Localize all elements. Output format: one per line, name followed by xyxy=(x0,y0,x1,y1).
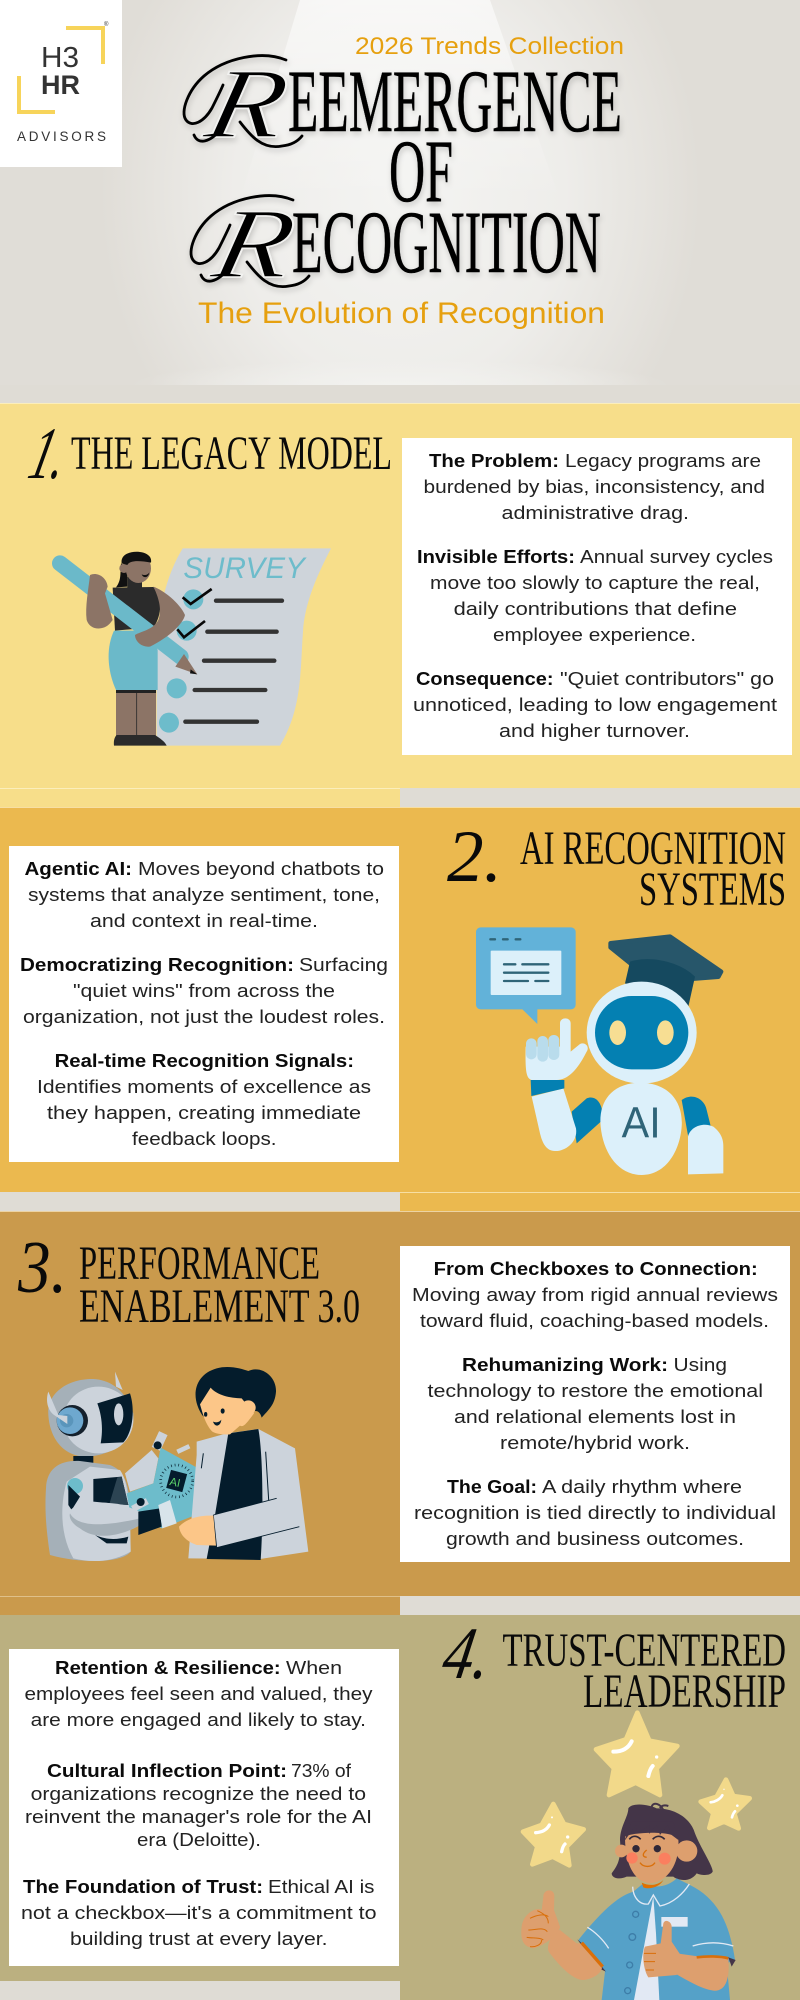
heading 1: 1. xyxy=(22,413,76,495)
text box 1: "Quiet contributors" go xyxy=(560,668,774,689)
text box 1 xyxy=(402,438,792,755)
subtitle: The Evolution of Recognition xyxy=(198,297,605,330)
text box 2: Surfacing xyxy=(299,954,388,975)
heading 4 xyxy=(437,1613,786,1718)
text box 3: technology to restore the emotional xyxy=(428,1380,763,1401)
illustration: graduate robot xyxy=(476,927,723,1175)
logo: HR xyxy=(41,70,80,100)
heading 3 xyxy=(17,1227,360,1333)
text box 2: feedback loops. xyxy=(132,1128,276,1149)
text box 3: The Goal: xyxy=(447,1476,537,1497)
text box 1: Annual survey cycles xyxy=(580,546,773,567)
text box 4: not a checkbox—it's a commitment to xyxy=(21,1902,376,1923)
text box 3: growth and business outcomes. xyxy=(446,1528,744,1549)
text box 4: Cultural Inflection Point: xyxy=(47,1760,287,1781)
text box 4: era (Deloitte). xyxy=(137,1829,261,1850)
illustration: robot and woman with AI tablet: AI xyxy=(168,1476,181,1490)
text box 4: organizations recognize the need to xyxy=(31,1783,366,1804)
text box 1: daily contributions that define xyxy=(454,598,737,619)
header panel xyxy=(0,0,800,385)
main title: OF xyxy=(389,123,453,221)
heading 3: 3. xyxy=(17,1227,67,1309)
text box 3: Rehumanizing Work: xyxy=(462,1354,668,1375)
heading 3: PERFORMANCE xyxy=(79,1237,320,1290)
logo xyxy=(0,0,122,167)
text box 2: Agentic AI: xyxy=(24,858,132,879)
text box 4: reinvent the manager's role for the AI xyxy=(25,1806,372,1827)
illustration: robot and woman with AI tablet xyxy=(45,1367,308,1561)
heading 2: 2. xyxy=(447,816,502,898)
main title: R xyxy=(203,188,305,299)
text box 1: The Problem: xyxy=(429,450,559,471)
text box 3: and relational elements lost in xyxy=(454,1406,736,1427)
logo: ® xyxy=(104,21,109,28)
text box 2: Moves beyond chatbots to xyxy=(138,858,384,879)
logo: ADVISORS xyxy=(17,129,106,144)
text box 1: unnoticed, leading to low engagement xyxy=(413,694,777,715)
text box 3: remote/hybrid work. xyxy=(500,1432,690,1453)
panel: 4 Trust-Centered Leadership xyxy=(0,1613,800,2000)
eyebrow: 2026 Trends Collection: 2026 Trends Collection xyxy=(355,33,624,60)
main title xyxy=(184,48,622,299)
heading 2 xyxy=(447,816,786,916)
text box 3: Using xyxy=(674,1354,727,1375)
text box 4: The Foundation of Trust: xyxy=(23,1876,263,1897)
text box 1: administrative drag. xyxy=(502,502,689,523)
text box 4: 73% of xyxy=(291,1760,352,1781)
text box 4: Retention & Resilience: xyxy=(55,1657,281,1678)
panel 3 background xyxy=(0,1211,800,1615)
text box 3 xyxy=(400,1246,790,1562)
text box 4: are more engaged and likely to stay. xyxy=(31,1709,366,1730)
illustration: woman with survey: SURVEY xyxy=(183,552,307,585)
illustration: girl with thumbs up and stars xyxy=(521,1713,750,2000)
panel: 1 The Legacy Model xyxy=(0,403,800,807)
text box 2: Democratizing Recognition: xyxy=(20,954,294,975)
panel 1 background xyxy=(0,403,800,807)
text box 4: employees feel seen and valued, they xyxy=(24,1683,373,1704)
heading 4: 4. xyxy=(437,1613,497,1695)
text box 1: Consequence: xyxy=(416,668,554,689)
heading 1: THE LEGACY MODEL xyxy=(71,427,392,480)
text box 3: A daily rhythm where xyxy=(542,1476,742,1497)
text box 2: they happen, creating immediate xyxy=(47,1102,361,1123)
heading 3: ENABLEMENT 3.0 xyxy=(79,1280,360,1333)
header spotlight background xyxy=(0,0,800,385)
panel: 2 AI Recognition Systems xyxy=(0,807,800,1212)
text box 1: and higher turnover. xyxy=(499,720,690,741)
text box 2 xyxy=(9,846,399,1162)
text box 1: Invisible Efforts: xyxy=(417,546,575,567)
text box 4: When xyxy=(286,1657,342,1678)
text box 1: employee experience. xyxy=(493,624,696,645)
text box 2: "quiet wins" from across the xyxy=(73,980,335,1001)
text box 1: Legacy programs are xyxy=(565,450,761,471)
illustration: graduate robot: AI xyxy=(622,1099,661,1147)
text box 4: Ethical AI is xyxy=(268,1876,374,1897)
text box 3: recognition is tied directly to individual xyxy=(414,1502,776,1523)
heading 1 xyxy=(22,413,392,495)
main title: R xyxy=(196,48,298,159)
text box 4 xyxy=(9,1649,399,1966)
text box 1: move too slowly to capture the real, xyxy=(430,572,760,593)
text box 1: burdened by bias, inconsistency, and xyxy=(424,476,765,497)
panel 4 background xyxy=(0,1615,800,2000)
text box 3: From Checkboxes to Connection: xyxy=(434,1258,758,1279)
text box 3: toward fluid, coaching-based models. xyxy=(420,1310,769,1331)
text box 2: systems that analyze sentiment, tone, xyxy=(28,884,380,905)
text box 2: organization, not just the loudest roles. xyxy=(23,1006,385,1027)
panel 2 background xyxy=(0,807,800,1212)
text box 3: Moving away from rigid annual reviews xyxy=(412,1284,778,1305)
illustration: woman with survey xyxy=(60,548,331,746)
text box 2: and context in real-time. xyxy=(90,910,318,931)
text box 2: Identifies moments of excellence as xyxy=(37,1076,371,1097)
logo: H3 xyxy=(41,42,79,74)
panel: 3 Performance Enablement 3.0 xyxy=(0,1211,800,1615)
text box 2: Real-time Recognition Signals: xyxy=(55,1050,354,1071)
text box 4: building trust at every layer. xyxy=(70,1928,328,1949)
